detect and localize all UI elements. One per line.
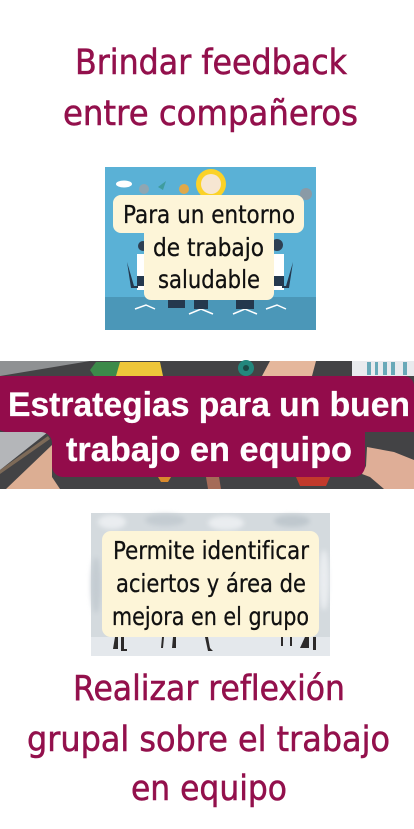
heading: Brindar feedback entre compañeros: entre compañeros — [63, 94, 358, 134]
title banner: Estrategias para un buen trabajo en equipo — [0, 376, 414, 477]
heading: Brindar feedback entre compañeros — [63, 43, 358, 134]
heading: Realizar reflexión grupal sobre el trabajo en equipo: Realizar reflexión — [73, 669, 345, 709]
caption text — [112, 536, 310, 631]
illustration: meeting room — [105, 167, 316, 330]
caption text — [123, 200, 295, 294]
panel: office illustration with caption — [105, 167, 316, 330]
caption text: mejora en el grupo — [112, 602, 309, 631]
panel: gears photo with caption — [91, 513, 330, 656]
photo: people holding gears wall — [91, 513, 330, 656]
caption box — [102, 531, 319, 637]
caption text: saludable — [158, 265, 260, 294]
caption text: Para un entorno — [123, 200, 295, 229]
title banner: Estrategias para un buen trabajo en equipo: trabajo en equipo — [66, 431, 352, 469]
heading: Realizar reflexión grupal sobre el trabajo en equipo: grupal sobre el trabajo — [27, 720, 390, 760]
caption box — [113, 195, 304, 300]
banner: photo with gears and hands — [0, 360, 414, 489]
heading: Realizar reflexión grupal sobre el trabajo en equipo: en equipo — [131, 769, 287, 809]
title banner: Estrategias para un buen trabajo en equipo: Estrategias para un buen — [8, 386, 410, 424]
heading: Brindar feedback entre compañeros: Brindar feedback — [75, 43, 348, 83]
caption text: aciertos y área de — [116, 569, 306, 598]
heading: Realizar reflexión grupal sobre el trabajo en equipo — [27, 669, 390, 809]
caption text: Permite identificar — [113, 536, 310, 565]
caption text: de trabajo — [153, 233, 264, 262]
